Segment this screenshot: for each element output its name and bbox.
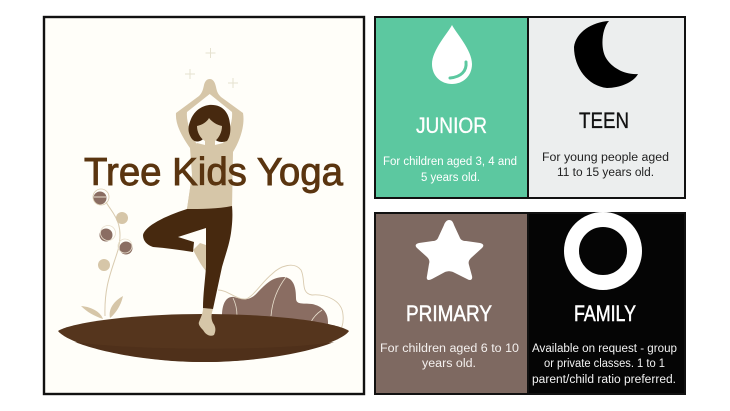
panel: family [528,213,685,394]
panel: yoga illustration [44,17,364,394]
text: teen description: 11 to 15 years old. [557,167,654,179]
heading: family: FAMILY [574,301,636,326]
plant with berries [81,189,132,319]
panel: primary [375,213,528,394]
text: family description: parent/child ratio preferred. [532,374,676,386]
icon: crescent moon [574,21,638,88]
text: teen description [542,152,669,179]
text: primary description [380,343,519,370]
text: teen description: For young people aged [542,152,669,164]
heading: junior: JUNIOR [416,113,487,138]
ground [58,314,349,362]
icon: sparkles [185,48,238,88]
panel: junior [375,17,528,198]
icon: ring [572,220,634,282]
text: family description: Available on request - group [532,343,677,355]
text: family description [532,343,677,386]
text: primary description: For children aged 6 to 10 [380,343,519,355]
heading: primary: PRIMARY [406,301,492,326]
text: junior description: For children aged 3, 4 and [383,156,517,168]
text: junior description: 5 years old. [421,172,480,184]
figure: woman in tree pose [143,79,244,336]
title: Tree Kids Yoga [84,151,343,194]
heading: teen: TEEN [579,108,629,133]
bush [218,265,343,333]
icon: star [416,220,483,280]
text: junior description [383,156,517,184]
text: family description: or private classes. 1 to 1 [544,358,665,370]
panel: teen [528,17,685,198]
icon: water drop [432,25,472,84]
text: primary description: years old. [422,358,476,370]
